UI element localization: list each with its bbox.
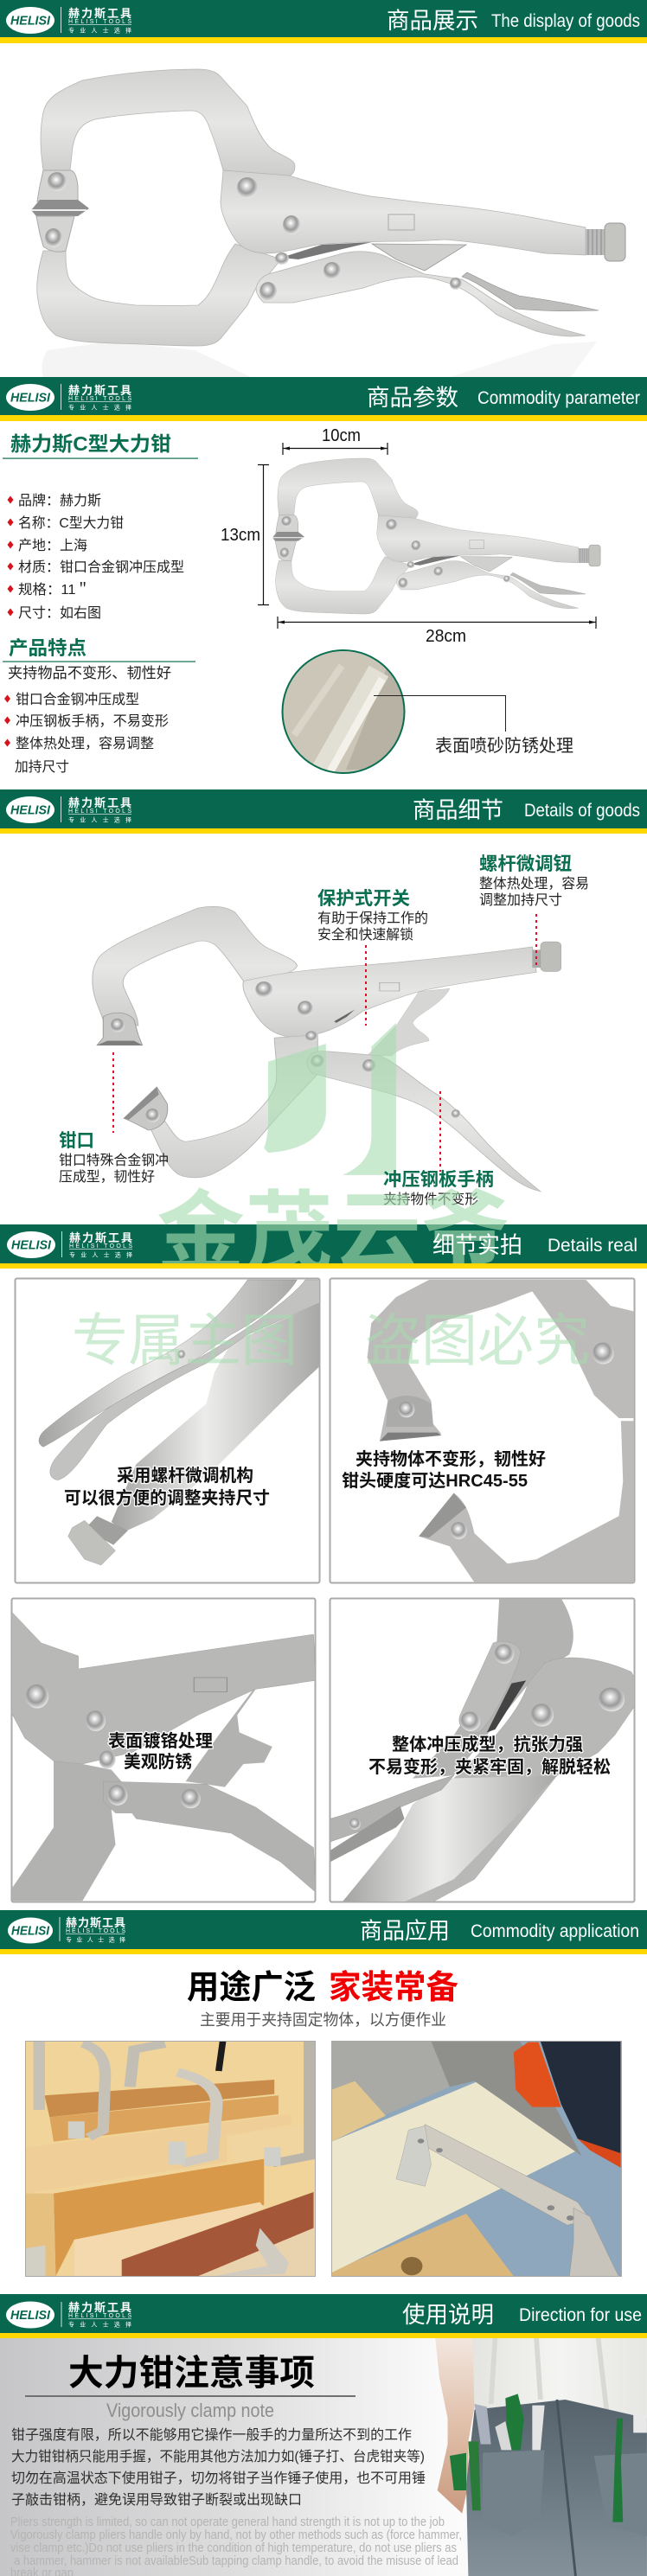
caption: 整体冲压成型，抗张力强 bbox=[392, 1734, 583, 1755]
logo bbox=[6, 384, 131, 412]
application headline: 家装常备 bbox=[329, 1970, 458, 2006]
banner: the display of goods bbox=[0, 0, 647, 43]
photo panel: chrome surface bbox=[11, 1598, 316, 1902]
banner: details real bbox=[0, 1224, 647, 1269]
logo: 赫力斯工具 bbox=[66, 1916, 125, 1929]
application headline bbox=[187, 1970, 458, 2006]
notes body english: vise clamp etc.)Do not use pliers in the condition of high temperature, do not use pliers as bbox=[10, 2541, 457, 2555]
surface close-up circle bbox=[282, 650, 415, 773]
logo bbox=[7, 1231, 132, 1259]
length label 28cm: 28cm bbox=[426, 627, 466, 646]
width label 10cm: 10cm bbox=[322, 426, 361, 445]
logo: HELISI bbox=[11, 1238, 52, 1252]
caption: 采用螺杆微调机构 bbox=[117, 1466, 253, 1486]
logo: 赫力斯工具 bbox=[68, 7, 131, 20]
label: jaw: 钳口特殊合金钢冲 bbox=[59, 1153, 169, 1168]
watermark: brand text: 金茂云爷 bbox=[157, 1184, 509, 1283]
banner: direction for use bbox=[0, 2294, 647, 2338]
photo panel: screw adjuster bbox=[16, 1278, 320, 1582]
features list: 加持尺寸 bbox=[15, 759, 69, 775]
banner title: 商品细节 bbox=[413, 797, 503, 823]
label: stamped handle: 冲压钢板手柄 bbox=[383, 1170, 494, 1190]
notes title: 大力钳注意事项 bbox=[68, 2353, 315, 2393]
logo: 专业人士选择 bbox=[69, 1250, 132, 1259]
specification list bbox=[7, 493, 184, 621]
banner title: 使用说明 bbox=[402, 2302, 494, 2328]
logo: 赫力斯工具 bbox=[69, 1231, 132, 1244]
notes body chinese: 子敲击钳柄，避免误用导致钳子断裂或出现缺口 bbox=[11, 2492, 302, 2508]
label: stamped handle bbox=[383, 1091, 494, 1207]
banner title: 商品应用 bbox=[360, 1918, 450, 1944]
features list: 冲压钢板手柄，不易变形 bbox=[16, 713, 169, 729]
length label 28cm bbox=[278, 617, 596, 646]
banner: details of goods bbox=[0, 789, 647, 834]
logo bbox=[6, 7, 131, 35]
logo: HELISI TOOLS bbox=[69, 1243, 132, 1250]
label: adjusting screw: 调整加持尺寸 bbox=[479, 892, 562, 908]
caption bbox=[342, 1448, 546, 1491]
callout: sandblasted surface: 表面喷砂防锈处理 bbox=[435, 736, 573, 756]
specification list: 产地：上海 bbox=[18, 538, 87, 553]
features list: 整体热处理，容易调整 bbox=[16, 736, 154, 751]
features list: 钳口合金钢冲压成型 bbox=[16, 692, 139, 707]
logo: HELISI bbox=[10, 14, 51, 28]
label: jaw bbox=[59, 1052, 169, 1185]
application subheading: 主要用于夹持固定物体，以方便作业 bbox=[200, 2011, 446, 2029]
label: protective switch: 有助于保持工作的 bbox=[317, 911, 428, 926]
callout: sandblasted surface bbox=[374, 695, 573, 756]
watermark text: 专属主图 bbox=[72, 1308, 298, 1372]
logo: HELISI TOOLS bbox=[68, 2313, 131, 2319]
banner: commodity application bbox=[0, 1910, 647, 1954]
banner title: 商品参数 bbox=[367, 385, 458, 411]
logo: 专业人士选择 bbox=[68, 816, 131, 823]
logo: HELISI TOOLS bbox=[68, 396, 131, 402]
banner title: 商品展示 bbox=[387, 8, 478, 34]
caption: 钳头硬度可达HRC45-55 bbox=[342, 1471, 528, 1491]
banner 4 subtitle: Details real bbox=[548, 1236, 637, 1256]
notes body english bbox=[10, 2515, 462, 2576]
logo: HELISI bbox=[11, 1923, 50, 1939]
dimension drawing of pliers bbox=[221, 426, 600, 646]
height label 13cm: 13cm bbox=[221, 526, 260, 545]
logo: HELISI bbox=[10, 802, 51, 818]
specification list: 名称：C型大力钳 bbox=[18, 515, 124, 531]
specification list: 材质：钳口合金钢冲压成型 bbox=[18, 559, 184, 575]
photo: clamps on wood boxes bbox=[26, 2041, 315, 2276]
product photo with reflection bbox=[31, 69, 625, 377]
features list bbox=[4, 665, 171, 775]
label: adjusting screw: 螺杆微调钮 bbox=[479, 854, 572, 874]
caption: 不易变形，夹紧牢固，解脱轻松 bbox=[368, 1756, 611, 1777]
banner: commodity parameter bbox=[0, 377, 647, 421]
features list: 夹持物品不变形、韧性好 bbox=[8, 665, 171, 681]
height label 13cm bbox=[221, 464, 269, 605]
label: protective switch: 安全和快速解锁 bbox=[317, 927, 413, 943]
logo: HELISI bbox=[10, 391, 51, 405]
notes body chinese: 大力钳钳柄只能用手握，不能用其他方法加力如(锤子打、台虎钳夹等) bbox=[11, 2449, 425, 2464]
logo: 专业人士选择 bbox=[68, 403, 131, 412]
caption: 美观防锈 bbox=[124, 1752, 192, 1772]
notes body chinese: 钳子强度有限，所以不能够用它操作一般手的力量所达不到的工作 bbox=[11, 2427, 412, 2443]
features heading: 产品特点 bbox=[9, 637, 86, 659]
notes body chinese bbox=[11, 2427, 426, 2508]
caption bbox=[64, 1466, 270, 1508]
photo: clamp on board with saw bbox=[332, 2041, 621, 2276]
logo: HELISI TOOLS bbox=[68, 19, 131, 25]
logo: 专业人士选择 bbox=[66, 1935, 125, 1944]
watermark: large green glyph bbox=[264, 1023, 396, 1175]
product name heading: 赫力斯C型大力钳 bbox=[10, 432, 171, 455]
specification list: 尺寸：如右图 bbox=[18, 605, 101, 621]
notes body english: a hammer, hammer is not availableSub tapping clamp handle, to avoid the misuse of lead bbox=[14, 2554, 458, 2568]
notes subtitle: Vigorously clamp note bbox=[106, 2400, 274, 2421]
notes body chinese: 切勿在高温状态下使用钳子，切勿将钳子当作锤子使用，也不可用锤 bbox=[11, 2471, 426, 2486]
label: adjusting screw bbox=[479, 854, 589, 966]
notes body english: Vigorously clamp pliers handle only by hand, not by other methods such as (force hammer, bbox=[10, 2528, 462, 2542]
photo: worker with tools in pockets bbox=[435, 2338, 647, 2576]
label: protective switch: 保护式开关 bbox=[317, 889, 410, 909]
caption: 夹持物体不变形，韧性好 bbox=[356, 1448, 546, 1469]
logo: 专业人士选择 bbox=[68, 26, 131, 35]
caption bbox=[108, 1730, 213, 1772]
label: adjusting screw: 整体热处理，容易 bbox=[479, 876, 589, 892]
label: stamped handle: 夹持物件不变形 bbox=[383, 1192, 478, 1207]
logo bbox=[6, 2301, 131, 2328]
logo: HELISI TOOLS bbox=[68, 809, 131, 815]
banner 4 title: 细节实拍 bbox=[432, 1232, 522, 1258]
logo bbox=[8, 1916, 125, 1944]
logo: HELISI bbox=[10, 2308, 51, 2323]
caption: 可以很方便的调整夹持尺寸 bbox=[64, 1487, 270, 1508]
specification list: 品牌：赫力斯 bbox=[18, 493, 101, 508]
label: jaw: 钳口 bbox=[59, 1131, 94, 1151]
logo: 赫力斯工具 bbox=[68, 384, 131, 397]
application headline: 用途广泛 bbox=[187, 1970, 316, 2006]
notes body english: Pliers strength is limited, so can not operate general hand strength it is not up to the job bbox=[10, 2515, 445, 2529]
label: jaw: 压成型，韧性好 bbox=[59, 1169, 155, 1185]
logo bbox=[6, 796, 131, 823]
logo: HELISI TOOLS bbox=[66, 1928, 125, 1934]
width label 10cm bbox=[283, 426, 388, 455]
photo panel: jaw hardness bbox=[330, 1278, 635, 1582]
open pliers diagram bbox=[93, 906, 561, 1192]
caption: 表面镀铬处理 bbox=[108, 1730, 213, 1751]
caption bbox=[368, 1734, 611, 1777]
photo panel: stamped body bbox=[330, 1598, 635, 1902]
watermark text: 盗图必究 bbox=[365, 1308, 590, 1372]
specification list: 规格：11＂ bbox=[18, 581, 90, 598]
label: protective switch bbox=[317, 889, 428, 1026]
panel: usage notes background bbox=[0, 2338, 647, 2576]
logo: 赫力斯工具 bbox=[68, 2301, 131, 2314]
logo: 专业人士选择 bbox=[68, 2321, 131, 2328]
logo: 赫力斯工具 bbox=[68, 796, 131, 809]
